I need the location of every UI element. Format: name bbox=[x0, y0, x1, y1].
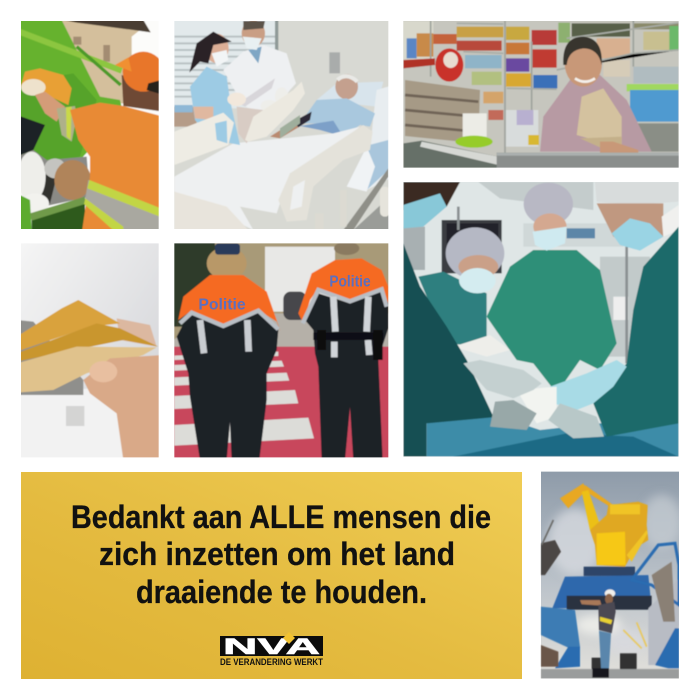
banner background bbox=[21, 472, 522, 679]
photo: shopkeeper behind counter bbox=[400, 17, 683, 170]
N-VA logo: DE VERANDERING WERKT bbox=[220, 657, 323, 667]
photo: port crane with worker bbox=[540, 472, 679, 678]
label: Politie on right jacket: Politie bbox=[329, 273, 371, 290]
photo: two police officers at crossing bbox=[170, 240, 393, 463]
label: Politie on left jacket: Politie bbox=[198, 296, 246, 313]
photo: hospital bed with nurse and doctor bbox=[170, 17, 393, 233]
photo: hand with envelopes at mailbox bbox=[17, 240, 163, 460]
headline text: draaiende te houden. bbox=[136, 574, 427, 610]
headline text: Bedankt aan ALLE mensen die bbox=[71, 499, 491, 535]
photo: surgeons operating bbox=[400, 177, 683, 460]
N-VA logo bbox=[220, 632, 323, 667]
photo: waste collector bbox=[21, 21, 159, 229]
headline text: zich inzetten om het land bbox=[99, 536, 455, 572]
yellow message banner bbox=[21, 472, 522, 679]
N-VA logo: NVA bbox=[223, 634, 320, 659]
headline text bbox=[71, 499, 491, 610]
